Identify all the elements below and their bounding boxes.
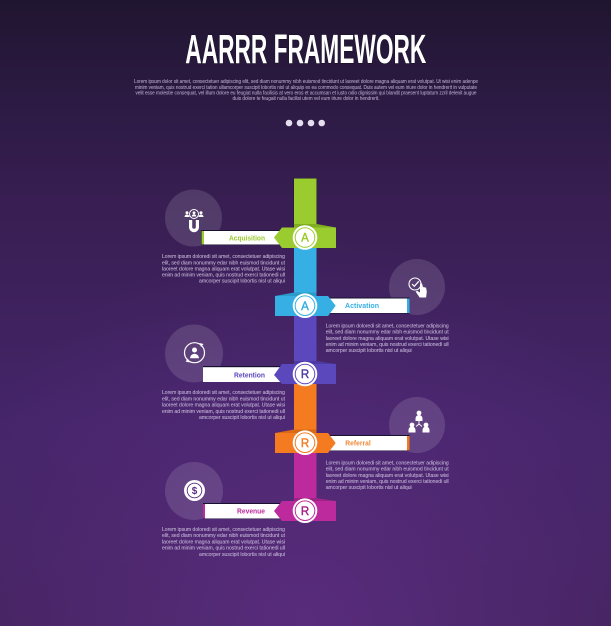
- stem: referral orange: [275, 384, 316, 436]
- label bar: [329, 435, 410, 451]
- step: activation: [275, 293, 410, 318]
- text: activation: enim ad minim veniam, quis nostrud exerci tationedi ull: [326, 342, 449, 348]
- icon: check and tapping hand: [409, 278, 427, 298]
- label text: Referral: [345, 440, 371, 447]
- pagination dots: [286, 120, 325, 126]
- letter badge: A: [301, 233, 309, 245]
- step: referral: [275, 430, 410, 455]
- label text: Acquisition: [229, 235, 265, 242]
- text: retention: elit, sed diam nonummy edar nibh euismod tincidunt ut: [162, 396, 285, 402]
- letter badge: R: [301, 506, 309, 518]
- step: retention: [203, 362, 336, 386]
- text: referral: [326, 460, 449, 491]
- color band: [274, 501, 336, 521]
- color band: [274, 228, 336, 248]
- color band: [274, 364, 336, 384]
- text: referral: amcorper suscipit lobortis nisl ut aliqui: [326, 485, 412, 491]
- intro paragraph: velit esse molestie consequat, vel illum dolore eu feugiat nulla facilisis at vero eros et accumsan et iusto odio dignissim qui blandit praesent luptatum zzril delenit augue: [136, 90, 476, 96]
- text: revenue: Lorem ipsum doloredi sit amet, consectetuer adipiscing: [162, 527, 285, 533]
- text: retention: enim ad minim veniam, quis nostrud exerci tationedi ull: [162, 409, 285, 415]
- text: retention: [162, 390, 285, 421]
- text: revenue: amcorper suscipit lobortis nisl ut aliqui: [199, 552, 285, 558]
- label bar: [201, 230, 281, 245]
- intro paragraph: [134, 79, 478, 102]
- title: AARRR FRAMEWORK: [185, 26, 427, 72]
- stem: retention purple: [294, 316, 336, 368]
- text: revenue: elit, sed diam nonummy edar nibh euismod tincidunt ut: [162, 533, 285, 539]
- color band: [275, 296, 336, 316]
- icon circle: activation: [389, 259, 445, 315]
- icon: magnet with people: [184, 210, 204, 232]
- label bar: [329, 298, 410, 314]
- icon circle: acquisition: [165, 190, 222, 246]
- label text: Activation: [345, 303, 379, 310]
- stem: revenue magenta: [294, 453, 336, 505]
- text: referral: enim ad minim veniam, quis nostrud exerci tationedi ull: [326, 479, 449, 485]
- stem: activation blue: [275, 248, 316, 298]
- icon: dollar coin: $: [192, 486, 198, 497]
- label text: Retention: [234, 372, 265, 379]
- step: revenue: [203, 498, 336, 523]
- text: retention: laoreet dolore magna aliquam erat volutpat. Utase wisi: [162, 403, 285, 409]
- step: acquisition: [201, 225, 336, 250]
- intro paragraph: minim veniam, quis nostrud exerci tation ullamcorper suscipit lobortis nisl ut aliquip ex ea commodo consequat. Duis autem vel eum iriure dolor in hendrerit in vulputate: [135, 85, 477, 91]
- letter badge: R: [301, 369, 309, 381]
- text: revenue: [162, 527, 285, 558]
- text: retention: amcorper suscipit lobortis nisl ut aliqui: [199, 415, 285, 421]
- intro paragraph: duis dolore te feugait nulla facilisi utem vel eum iriure dolor in hendrerit.: [232, 96, 380, 102]
- color band: [275, 433, 336, 453]
- text: acquisition: enim ad minim veniam, quis nostrud exerci tationedi ull: [162, 273, 285, 279]
- text: acquisition: amcorper suscipit lobortis nisl ut aliqui: [199, 279, 285, 285]
- text: acquisition: laoreet dolore magna aliquam erat volutpat. Utase wisi: [162, 266, 285, 272]
- text: referral: laoreet dolore magna aliquam erat volutpat. Utase wisi: [326, 473, 449, 479]
- text: revenue: laoreet dolore magna aliquam erat volutpat. Utase wisi: [162, 539, 285, 545]
- icon: three people network: [408, 411, 430, 432]
- text: referral: Lorem ipsum doloredi sit amet, consectetuer adipiscing: [326, 460, 449, 466]
- text: activation: elit, sed diam nonummy edar nibh euismod tincidunt ut: [326, 330, 449, 336]
- stem: acquisition green: [294, 178, 336, 228]
- icon: person with cycle arrows: [184, 343, 204, 363]
- text: acquisition: Lorem ipsum doloredi sit amet, consectetuer adipiscing: [162, 254, 285, 260]
- label bar: [203, 366, 281, 382]
- text: activation: laoreet dolore magna aliquam erat volutpat. Utase wisi: [326, 336, 449, 342]
- intro paragraph: Lorem ipsum dolor sit amet, consectetuer adipiscing elit, sed diam nonummy nibh euismod tincidunt ut laoreet dolore magna aliquam erat volutpat. Ut wisi enim adenpe: [134, 79, 478, 85]
- text: activation: [326, 324, 449, 354]
- icon circle: revenue: [165, 462, 223, 520]
- icon circle: retention: [165, 324, 223, 382]
- text: referral: elit, sed diam nonummy edar nibh euismod tincidunt ut: [326, 467, 449, 473]
- text: retention: Lorem ipsum doloredi sit amet, consectetuer adipiscing: [162, 390, 285, 396]
- text: acquisition: elit, sed diam nonummy edar nibh euismod tincidunt ut: [162, 260, 285, 266]
- label bar: [203, 503, 281, 519]
- text: activation: amcorper suscipit lobortis nisl ut aliqui: [326, 348, 412, 354]
- text: activation: Lorem ipsum doloredi sit amet, consectetuer adipiscing: [326, 324, 449, 330]
- text: revenue: enim ad minim veniam, quis nostrud exerci tationedi ull: [162, 546, 285, 552]
- letter badge: R: [301, 438, 309, 450]
- letter badge: A: [301, 301, 309, 313]
- text: acquisition: [162, 254, 285, 285]
- icon circle: referral: [389, 397, 445, 453]
- label text: Revenue: [237, 508, 265, 516]
